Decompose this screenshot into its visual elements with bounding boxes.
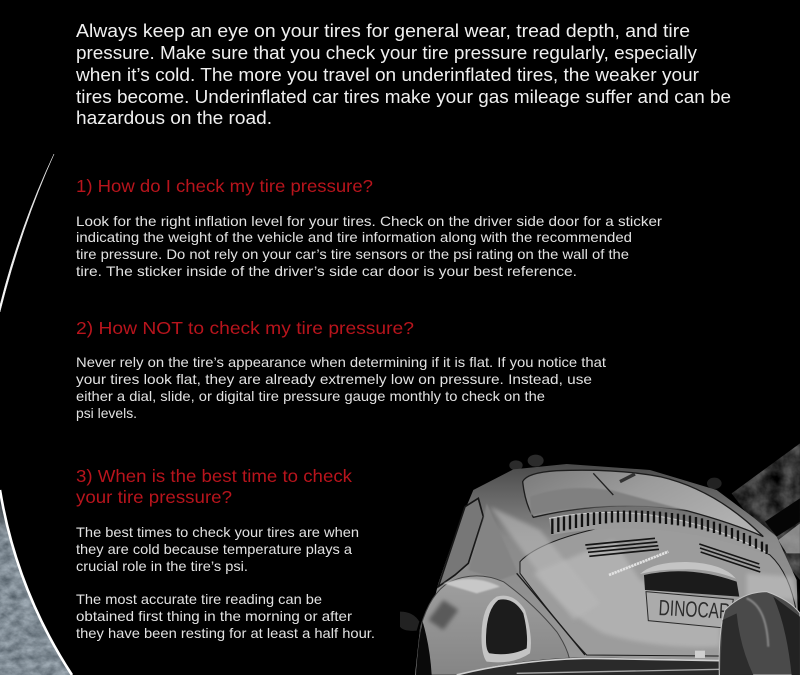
section 2 body (76, 355, 606, 421)
intro paragraph (75, 20, 731, 128)
section 1 body (76, 214, 663, 279)
section 2 body: Never rely on the tire’s appearance when determining if it is flat. If you notice that (76, 355, 606, 370)
section 1 body: tire. The sticker inside of the driver’s side car door is your best reference. (76, 264, 577, 279)
fender (416, 576, 569, 675)
section 1 heading: 1) How do I check my tire pressure? (76, 176, 373, 196)
section 3 heading: your tire pressure? (76, 487, 232, 507)
section 3 body: they are cold because temperature plays a (76, 542, 352, 557)
rear bumper (457, 657, 720, 675)
section 1 body: indicating the weight of the vehicle and tire information along with the recommended (76, 230, 632, 245)
car body (415, 464, 800, 675)
roof bumps (509, 460, 523, 470)
car photo: grayscale beetle (400, 440, 800, 675)
intro paragraph: tires become. Underinflated car tires make your gas mileage suffer and can be (76, 86, 731, 107)
section 3 heading: 3) When is the best time to check (76, 466, 352, 486)
section 1 body: Look for the right inflation level for your tires. Check on the driver side door for a sticker (76, 214, 663, 229)
license plate light (640, 562, 736, 579)
section 2 heading: 2) How NOT to check my tire pressure? (76, 318, 414, 338)
section 3 body: crucial role in the tire’s psi. (76, 559, 248, 574)
engine lid (520, 524, 797, 657)
license plate: DINOCAR (658, 595, 731, 624)
intro paragraph: when it’s cold. The more you travel on underinflated tires, the weaker your (75, 64, 699, 85)
section 3 heading (76, 466, 352, 507)
section 1 body: tire pressure. Do not rely on your car’s tire sensors or the psi rating on the wall of the (76, 247, 629, 262)
planet texture and rim (0, 490, 73, 675)
section 3 body: The most accurate tire reading can be (76, 592, 322, 607)
intro paragraph: pressure. Make sure that you check your tire pressure regularly, especially (76, 42, 698, 63)
chrome script badge (609, 552, 668, 575)
tail light (482, 596, 531, 662)
mirror (400, 612, 419, 631)
section 3 body: The best times to check your tires are when (76, 525, 359, 540)
section 3 body: obtained first thing in the morning or after (76, 609, 353, 624)
rear window (523, 470, 763, 537)
small vents (585, 538, 760, 572)
section 2 body: your tires look flat, they are already extremely low on pressure. Instead, use (76, 372, 592, 387)
section 3 body (76, 525, 375, 641)
side window (438, 498, 483, 587)
section 3 body: they have been resting for at least a half hour. (76, 626, 375, 641)
thin upper arc (0, 154, 54, 312)
intro paragraph: Always keep an eye on your tires for general wear, tread depth, and tire (76, 20, 690, 41)
top vent slats (549, 512, 768, 555)
license plate (646, 592, 733, 628)
section 2 body: either a dial, slide, or digital tire pressure gauge monthly to check on the (76, 389, 545, 404)
building backdrop (730, 440, 800, 583)
spare tire cover (719, 592, 800, 675)
intro paragraph: hazardous on the road. (76, 107, 272, 128)
section 2 body: psi levels. (76, 406, 137, 421)
